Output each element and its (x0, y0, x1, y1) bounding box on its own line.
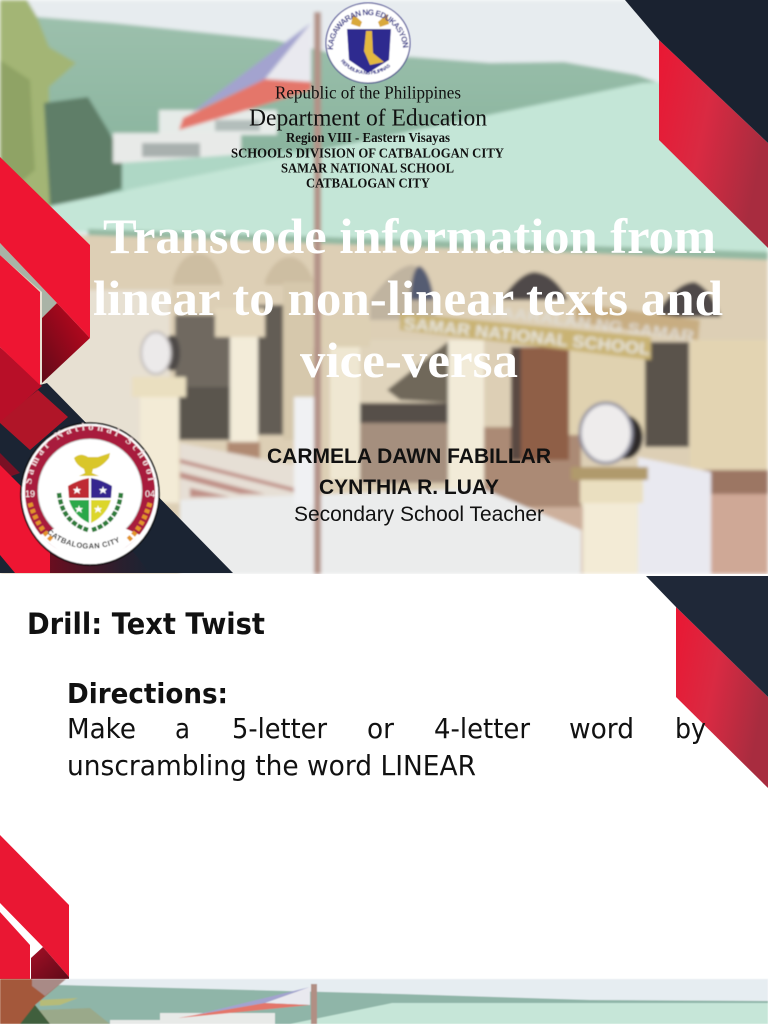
main title: Transcode information from (103, 208, 716, 264)
seal gold stars (30, 503, 150, 540)
pillar clocks (164, 335, 180, 371)
bottom strip left corner (0, 979, 66, 1024)
right ribbon decoration, slide 1 (625, 0, 768, 248)
entrance pillars (140, 397, 179, 503)
school seal (19, 422, 161, 566)
directions heading: Directions: (67, 677, 228, 710)
header text block: SCHOOLS DIVISION OF CATBALOGAN CITY (231, 146, 504, 162)
floor (180, 443, 294, 500)
flag pole (314, 12, 321, 574)
presenter names: Secondary School Teacher (294, 503, 544, 526)
left ribbon decoration, slide 2 (0, 835, 69, 979)
Philippine flag (191, 23, 311, 113)
school seal: CATBALOGAN CITY (47, 529, 119, 550)
directions body text (67, 712, 706, 782)
arches (173, 253, 223, 285)
right ribbon decoration, slide 2 (646, 576, 768, 788)
presenter names: CARMELA DAWN FABILLAR (267, 445, 551, 468)
header text block: Department of Education (249, 106, 487, 132)
white posters (294, 397, 319, 505)
seal wreath (59, 493, 121, 530)
main title: linear to non-linear texts and (93, 270, 723, 326)
columns (230, 337, 258, 442)
seal lamp (74, 453, 110, 476)
DepEd seal (324, 2, 412, 84)
directions body text: word (569, 712, 634, 745)
floor red stripes (180, 459, 294, 497)
header text block: SAMAR NATIONAL SCHOOL (281, 162, 454, 176)
school sign: PAARALAN NG SAMAR (490, 303, 695, 345)
white building (159, 110, 277, 135)
directions body text: or (367, 712, 394, 745)
seal lettering: KAGAWARAN NG EDUKASYON (326, 8, 410, 50)
slide 1 background photo of the school (0, 0, 768, 574)
directions body text: 5-letter (232, 712, 327, 745)
directions body text: a (175, 712, 190, 745)
slide 2 white panel (0, 574, 768, 979)
seal city band (40, 527, 140, 560)
school seal: 04 (145, 489, 155, 499)
main title (93, 208, 723, 388)
directions body text: unscrambling the word LINEAR (67, 749, 476, 782)
lower wall band (688, 470, 768, 494)
presenter names: CYNTHIA R. LUAY (319, 476, 499, 499)
seal shield (347, 29, 391, 73)
header text block: Region VIII - Eastern Visayas (286, 130, 450, 145)
presenter names (267, 445, 551, 526)
header text block: CATBALOGAN CITY (306, 176, 430, 192)
green roof (122, 150, 300, 190)
seal shield quadrants (68, 478, 112, 523)
hillside (37, 17, 665, 200)
school sign (400, 303, 700, 360)
dark doorways (175, 315, 230, 387)
header text block: Republic of the Philippines (275, 82, 461, 102)
DepEd seal: REPUBLIKA NG PILIPINAS (340, 58, 391, 76)
school seal: 19 (25, 489, 35, 499)
main title: vice-versa (300, 332, 518, 388)
school building wall (0, 232, 768, 574)
drill heading: Drill: Text Twist (27, 607, 265, 641)
header text block (231, 82, 504, 192)
left ribbon decoration, slide 1 (0, 157, 233, 573)
seal lettering: Samar National School (24, 422, 156, 485)
directions body text: Make (67, 712, 136, 745)
school sign: SAMAR NATIONAL SCHOOL (403, 314, 651, 359)
bottom photo strip (0, 979, 768, 1024)
seal torches (351, 14, 389, 27)
directions body text: 4-letter (434, 712, 530, 745)
left trees (0, 0, 76, 300)
directions body text: by (675, 712, 706, 745)
